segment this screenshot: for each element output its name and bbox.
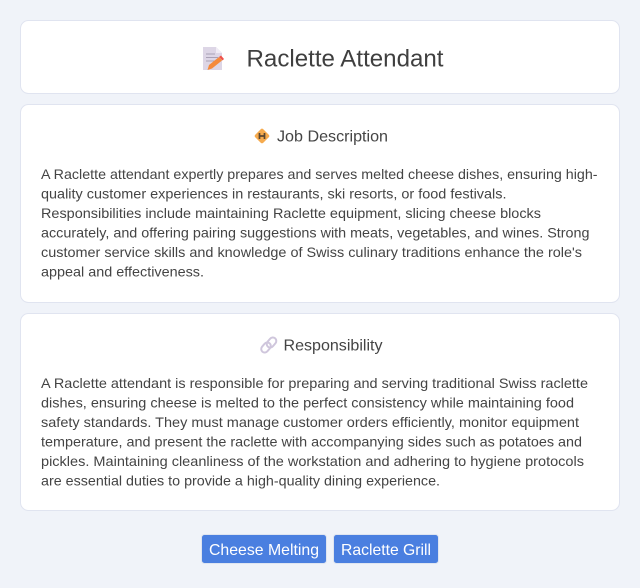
title text: Raclette Attendant	[246, 46, 444, 72]
heading: Responsibility	[284, 338, 382, 354]
icon: link	[260, 336, 278, 354]
tag: Cheese Melting	[202, 534, 326, 564]
text block	[41, 166, 598, 280]
text block: quality customer experiences in restaurants, ski resorts, or food festivals.	[41, 186, 506, 202]
panel: title	[20, 20, 620, 94]
tag: Raclette Grill: Raclette Grill	[341, 542, 431, 559]
icon: diamond sign	[254, 128, 270, 144]
icon: memo with pencil	[203, 47, 224, 70]
text block: temperature, and present the raclette with accompanying sides such as potatoes and	[41, 434, 582, 450]
text block: Responsibilities include maintaining Raclette equipment, slicing cheese blocks	[41, 205, 541, 221]
tag: Raclette Grill	[334, 534, 438, 564]
text block: accurately, and offering pairing suggestions with meats, vegetables, and wines. Strong	[41, 224, 590, 240]
text block: are essential duties to provide a high-quality dining experience.	[41, 472, 440, 488]
text block	[41, 375, 588, 488]
text block: customer service skills and knowledge of Swiss culinary traditions enhance the role's	[41, 244, 582, 260]
tag: Cheese Melting: Cheese Melting	[209, 542, 319, 559]
text block: dishes, ensuring cheese is melted to the perfect consistency while maintaining food	[41, 394, 574, 410]
text block: A Raclette attendant is responsible for preparing and serving traditional Swiss raclette	[41, 375, 588, 391]
heading: Job Description	[277, 128, 388, 146]
panel: job description	[20, 104, 620, 302]
panel: responsibility	[20, 314, 620, 510]
text block: pickles. Maintaining cleanliness of the workstation and adhering to hygiene protocols	[41, 453, 584, 469]
text block: appeal and effectiveness.	[41, 264, 204, 280]
text block: A Raclette attendant expertly prepares and serves melted cheese dishes, ensuring high-	[41, 166, 598, 182]
text block: safety standards. They must manage customer orders efficiently, monitor equipment	[41, 414, 579, 430]
